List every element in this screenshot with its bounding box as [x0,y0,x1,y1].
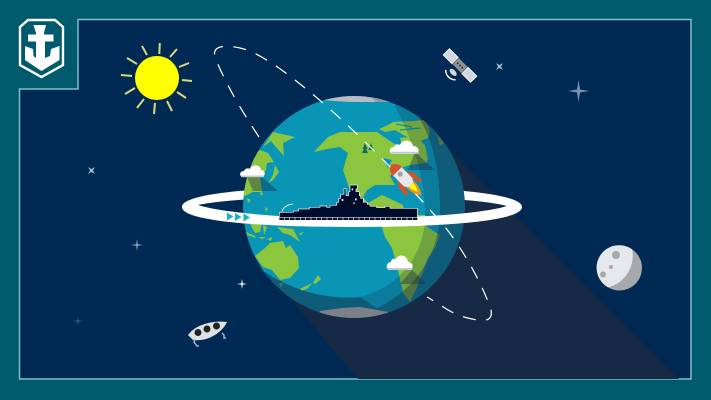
globe mid shadow [264,104,465,312]
small pine trees [362,143,374,153]
rocket [383,157,429,203]
arrow marker near rocket [383,158,392,168]
icon: satellite [435,49,477,91]
sun rays [121,43,192,114]
ring front half [182,205,522,227]
rocket body [392,166,415,189]
arctic water channels [396,124,420,130]
land: south america [378,215,440,302]
polar cap top [323,96,390,102]
dish [448,67,458,77]
land: greenland [437,135,444,146]
globe deep shadow [264,116,465,312]
icon: moon [597,245,642,290]
cloud left [240,165,265,177]
ring back half [182,187,522,227]
ship hull [279,185,417,218]
ocean [243,96,465,318]
satellite body [453,58,467,73]
logo: anchor shield [20,20,63,77]
dashed orbit [214,46,491,320]
globe [243,96,465,318]
clouds [240,141,419,270]
land: north america [314,132,427,215]
ring direction arrows [227,212,250,222]
cloud bottom right [387,256,413,270]
land: asia [263,132,295,156]
long shadow of the globe [283,140,679,379]
saucer legs [194,333,226,346]
rocket nose [386,160,402,176]
land: australia [255,241,299,280]
icon: sun [121,43,192,114]
rocket flame [407,181,425,199]
superstructure details [342,188,357,204]
moon lit side [597,245,633,287]
star large [568,80,589,102]
ship waterline [279,216,417,222]
star small [496,63,503,70]
sun disc [135,56,179,100]
polar cap bottom [320,307,388,318]
stars [73,63,589,326]
rocket fins [394,168,422,196]
solar panels [443,49,477,82]
battleship [279,185,417,219]
cloud top right [390,141,419,154]
stern crane [282,204,293,212]
rocket window [397,171,404,178]
icon: alien saucer [188,322,227,346]
craters [612,251,620,259]
land: canadian islands [379,120,430,141]
mountain shadows [247,152,435,284]
land: south-east asian islands [246,192,304,242]
land: new zealand and islands [279,275,321,291]
polar cap top shaded [372,98,390,102]
